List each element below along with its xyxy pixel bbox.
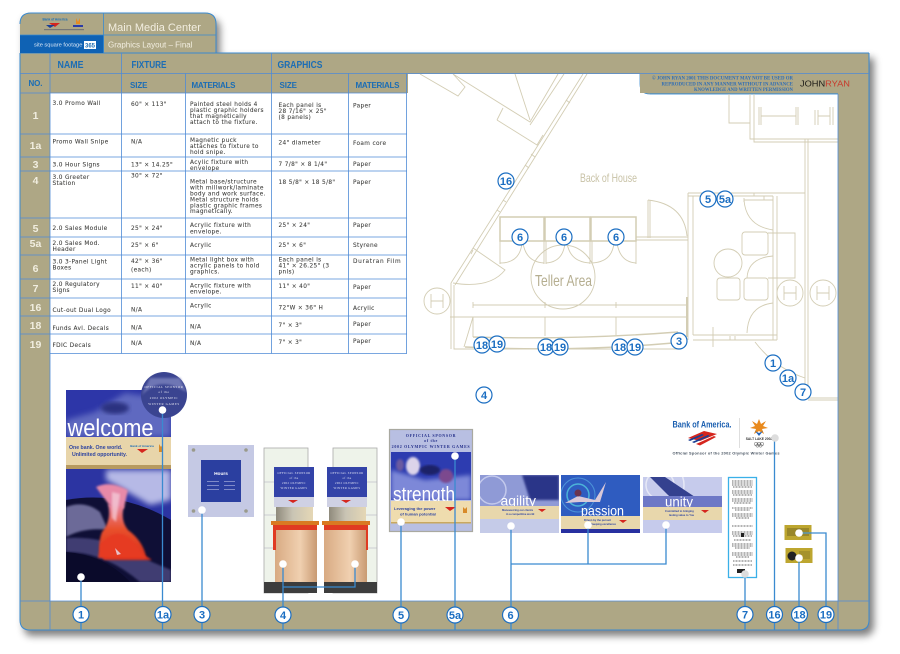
plan markers: 6 — [613, 232, 619, 244]
bottom legend markers: 19 — [820, 610, 832, 622]
greeter stations: OFFICIAL SPONSOR — [330, 471, 364, 475]
light box: agility — [478, 475, 559, 533]
bottom legend markers: 7 — [742, 610, 748, 622]
table body text: Paper — [353, 322, 371, 328]
header: graphics size: SIZE — [280, 81, 298, 90]
table body text: that magnetically — [190, 114, 247, 120]
table body text: Foam core — [353, 141, 387, 147]
table body text: Signs — [52, 288, 70, 294]
table body text: 18 5/8" × 18 5/8" — [278, 180, 335, 186]
copyright notice — [652, 74, 793, 93]
table body text: (8 panels) — [278, 115, 311, 121]
table body text: plastic graphic frames — [190, 203, 262, 209]
table body text: Magnetic puck — [190, 138, 237, 144]
plan markers: 19 — [491, 339, 503, 351]
greeter stations: OFFICIAL SPONSOR — [277, 471, 311, 475]
greeter stations: of the — [289, 476, 299, 480]
row numbers: 19 — [30, 339, 41, 351]
tab blue footage block: 365 — [85, 44, 96, 50]
row numbers: 5a — [30, 238, 41, 250]
table body text: 3.0 Hour Signs — [52, 162, 100, 168]
copyright notice: © JOHN RYAN 2001 THIS DOCUMENT MAY NOT BE USED OR — [652, 74, 793, 82]
row numbers: 16 — [30, 302, 41, 314]
table body text: Funds Avl. Decals — [52, 326, 109, 332]
table body text: 11" × 40" — [278, 284, 310, 290]
leader lines and dots — [77, 406, 826, 630]
table body text: Paper — [353, 223, 371, 229]
table body text: 25" × 6" — [131, 243, 159, 249]
greeter stations — [264, 448, 377, 593]
header: graphics: GRAPHICS — [278, 60, 323, 71]
table body text: N/A — [131, 341, 142, 347]
sales module poster: 2002 OLYMPIC WINTER GAMES — [392, 444, 470, 449]
bottom legend markers: 5 — [398, 610, 404, 622]
snipe disc: OFFICIAL SPONSOR — [145, 385, 184, 389]
sales module poster — [390, 430, 472, 532]
table body text: 41" × 26.25" (3 — [278, 264, 329, 270]
strength headline: strength — [393, 484, 455, 506]
table body text: 7" × 3" — [278, 323, 302, 329]
sales module poster: of the — [424, 438, 438, 443]
table body text — [52, 101, 401, 349]
table body text: N/A — [190, 341, 201, 347]
table body text: envelope — [190, 166, 220, 172]
plan markers: 5a — [719, 194, 732, 206]
table body text: 3.0 Promo Wall — [52, 101, 101, 107]
row numbers: 4 — [33, 175, 39, 187]
table body text: 42" × 36" — [131, 259, 163, 265]
plan markers: 5 — [705, 194, 711, 206]
row numbers: 6 — [33, 263, 39, 275]
bottom legend markers: 1a — [157, 610, 170, 622]
table body text: Acylic fixture with — [190, 160, 248, 166]
table body text: 2.0 Regulatory — [52, 282, 100, 288]
tab title: Main Media Center — [108, 22, 201, 34]
light box: passion: Driven by the pursuit — [584, 518, 611, 522]
plan label: Back of House: Back of House — [580, 171, 637, 185]
light box: unity: lasting value to You — [669, 513, 694, 517]
row numbers: 7 — [33, 283, 39, 295]
table body text: 30" × 72" — [131, 174, 163, 180]
table body text: N/A — [131, 308, 142, 314]
poster headline: welcome — [67, 415, 154, 442]
table body text: N/A — [190, 324, 201, 330]
table body text: attaches to fixture to — [190, 144, 259, 150]
plan markers: 7 — [800, 387, 806, 399]
header: name: NAME — [58, 60, 84, 71]
light box: agility: in a competitive world — [506, 512, 535, 516]
table body text: acrylic panels to hold — [190, 264, 260, 270]
plan markers: 1 — [770, 358, 776, 370]
table body text: Acrylic — [190, 304, 212, 310]
copyright and John Ryan block — [640, 72, 850, 94]
row numbers: 5 — [33, 223, 39, 235]
bottom legend markers: 6 — [507, 610, 514, 622]
plan markers — [474, 173, 811, 403]
poster cream band: Unlimited opportunity. — [72, 452, 128, 458]
table body text: body and work surface. — [190, 192, 266, 198]
table body text: 3.0 3-Panel Light — [52, 260, 108, 266]
table body text: 25" × 6" — [278, 243, 306, 249]
row numbers — [30, 110, 41, 351]
table body text: Metal light box with — [190, 258, 254, 264]
table body text: pnls) — [278, 270, 294, 276]
bottom legend markers: 5a — [449, 610, 462, 622]
light box: unity — [643, 477, 722, 533]
table body text: 11" × 40" — [131, 284, 163, 290]
plan markers: 6 — [517, 232, 523, 244]
snipe disc: of the — [159, 390, 169, 394]
copyright notice: REPRODUCED IN ANY MANNER WITHOUT IN ADVANCE — [662, 81, 793, 87]
plan markers: 1a — [782, 373, 795, 385]
light box: agility: agility — [500, 492, 536, 508]
Bank of America and Salt Lake 2002 logo: SALT LAKE 2002 — [746, 437, 772, 441]
promo wall welcome poster — [66, 372, 187, 582]
tab sponsor logos — [42, 18, 84, 30]
table body text: Acrylic fixture with — [190, 223, 251, 229]
icon: Salt Lake snowflake — [750, 419, 768, 436]
table body text: 28 7/16" × 25" — [278, 109, 327, 115]
greeter stations: WINTER GAMES — [334, 486, 360, 490]
row numbers: 3 — [33, 159, 39, 171]
poster cream band: One bank. One world. — [69, 445, 123, 451]
table body text: graphics. — [190, 270, 220, 276]
plan markers: 4 — [481, 390, 488, 402]
header: graphics materials: MATERIALS — [356, 81, 400, 90]
table body text: Cut-out Dual Logo — [52, 308, 111, 314]
table body text: 7 7/8" × 8 1/4" — [278, 162, 327, 168]
plan markers: 3 — [676, 336, 682, 348]
table body text: Promo Wall Snipe — [52, 140, 109, 146]
hours sign: Hours — [214, 471, 228, 477]
table body text: envelope. — [190, 290, 222, 296]
table body text: envelope. — [190, 229, 222, 235]
bottom legend markers: 16 — [768, 610, 781, 622]
header: no: NO. — [28, 79, 42, 88]
table body text: 7" × 3" — [278, 340, 302, 346]
greeter stations: of the — [342, 476, 352, 480]
icon: bank flag — [688, 431, 717, 446]
greeter stations: 2002 OLYMPIC — [282, 481, 306, 485]
tab blue footage block — [20, 35, 104, 53]
table body text: 60" × 113" — [131, 102, 167, 108]
tab blue footage block: site square footage — [34, 42, 82, 48]
table body text: 25" × 24" — [278, 223, 310, 229]
table body text: Paper — [353, 162, 371, 168]
title tab — [20, 13, 216, 53]
table body text: Metal base/structure — [190, 180, 257, 186]
table body text: hold snipe. — [190, 150, 226, 156]
table body text: with millwork/laminate — [190, 186, 264, 192]
table body text: Each panel is — [278, 258, 322, 264]
table body text: Paper — [353, 104, 371, 110]
Bank of America wordmark: Bank of America. — [672, 420, 732, 430]
table body text: N/A — [131, 140, 142, 146]
table body text: Acrylic — [190, 243, 212, 249]
bottom legend markers: 18 — [793, 610, 806, 622]
table body text: Duratran Film — [353, 259, 401, 265]
bottom legend markers: 4 — [280, 610, 287, 622]
bottom legend markers: 3 — [199, 610, 205, 622]
table body text: 72"W × 36" H — [278, 306, 323, 312]
light box: unity: unity — [665, 494, 693, 510]
poster cream band — [66, 437, 171, 469]
table body text: 24" diameter — [278, 141, 321, 147]
sales module poster: Leveraging the power — [394, 506, 436, 511]
Bank of America and Salt Lake 2002 logo — [672, 418, 780, 456]
table body text: Painted steel holds 4 — [190, 102, 258, 108]
plan markers: 18 — [476, 340, 488, 352]
plan markers: 16 — [500, 176, 512, 188]
table body text: 2.0 Sales Mod. — [52, 241, 100, 247]
table body text: Boxes — [52, 266, 71, 272]
plan markers: 6 — [561, 232, 567, 244]
table body text: Paper — [353, 339, 371, 345]
John Ryan wordmark: JOHNRYAN — [800, 78, 850, 88]
sales module poster: OFFICIAL SPONSOR — [406, 433, 456, 438]
table body text: 25" × 24" — [131, 226, 163, 232]
table body text: Paper — [353, 285, 371, 291]
row numbers: 1 — [33, 110, 39, 122]
light box: passion: Keeping excellence — [591, 522, 616, 526]
light box: agility: Manoeuvring our clients — [502, 508, 534, 512]
table body text: Header — [52, 247, 76, 253]
bottom legend markers — [73, 606, 834, 623]
bottom legend markers: 1 — [78, 610, 84, 622]
row numbers: 1a — [30, 140, 41, 152]
table body text: 13" × 14.25" — [131, 162, 173, 168]
plan markers: 18 — [614, 342, 626, 354]
funds decal — [784, 525, 812, 540]
table body text: N/A — [131, 326, 142, 332]
sponsor caption: Official Sponsor of the 2002 Olympic Winter Games — [672, 450, 780, 456]
tab subtitle: Graphics Layout – Final — [108, 40, 193, 50]
plan markers: 19 — [629, 342, 641, 354]
FDIC decal — [786, 548, 812, 563]
plan markers: 18 — [540, 342, 552, 354]
table body text: magnetically. — [190, 209, 233, 215]
poster cream band: Bank of America — [130, 444, 154, 448]
snipe disc — [141, 372, 187, 418]
light box: passion — [561, 475, 640, 533]
white plan area — [50, 74, 838, 601]
table body text: plastic graphic holders — [190, 108, 264, 114]
table body text: 3.0 Greeter — [52, 175, 90, 181]
table body text: Paper — [353, 180, 371, 186]
table body text: 2.0 Sales Module — [52, 226, 108, 232]
copyright notice: KNOWLEDGE AND WRITTEN PERMISSION — [694, 87, 793, 93]
plan markers: 19 — [554, 342, 566, 354]
table column header band — [28, 60, 400, 90]
regulatory sign — [728, 478, 756, 578]
snipe disc: WINTER GAMES — [148, 402, 180, 406]
table body text: Station — [52, 181, 76, 187]
header: fixture materials: MATERIALS — [192, 81, 236, 90]
light box: unity: Committed to bringing — [665, 509, 694, 513]
table body text: Acrylic fixture with — [190, 284, 251, 290]
sales module poster: of human potential — [400, 512, 436, 516]
hours sign — [188, 445, 254, 517]
table body text: Acrylic — [353, 306, 375, 312]
light box: passion: passion — [581, 502, 624, 518]
plan label: Teller Area: Teller Area — [535, 273, 592, 290]
table body text: attach to the fixture. — [190, 120, 258, 126]
header: fixture size: SIZE — [130, 81, 148, 90]
table body text: Each panel is — [278, 103, 322, 109]
snipe disc: 2002 OLYMPIC — [150, 396, 178, 400]
floor plan — [420, 74, 838, 400]
row numbers: 18 — [30, 320, 41, 332]
table body text: (each) — [131, 268, 152, 274]
header: fixture: FIXTURE — [132, 60, 167, 71]
table body text: Styrene — [353, 243, 378, 249]
icon: olympic rings — [754, 442, 764, 447]
greeter stations: 2002 OLYMPIC — [335, 481, 359, 485]
greeter stations: WINTER GAMES — [281, 486, 307, 490]
table body text: FDIC Decals — [52, 343, 91, 349]
tab sponsor logos: Bank of America — [42, 18, 68, 22]
table body text: Metal structure holds — [190, 198, 259, 204]
